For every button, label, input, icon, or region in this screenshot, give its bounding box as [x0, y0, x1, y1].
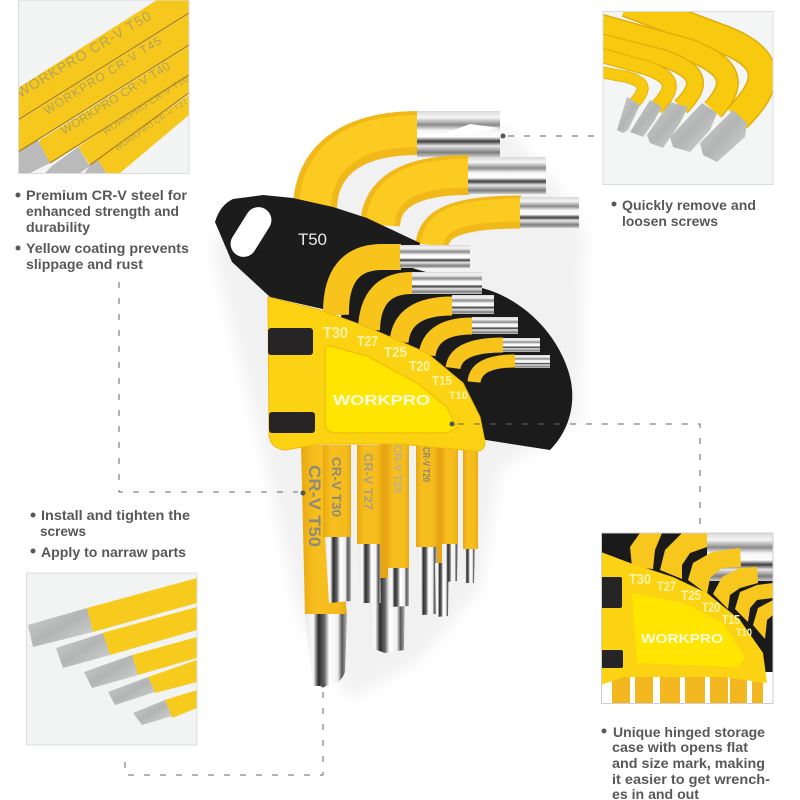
panel: steel close-up photo	[13, 0, 190, 173]
case body	[601, 552, 767, 685]
engraved text: WORKPRO CR-V T30	[101, 74, 190, 137]
bar T45	[18, 14, 189, 152]
arcs of wrenches	[630, 533, 773, 639]
long shafts below case	[301, 443, 478, 686]
shaft T30	[323, 445, 351, 603]
wrench T15	[453, 338, 540, 368]
L-wrench 4	[600, 55, 669, 137]
case size marks: T15	[432, 373, 452, 388]
wrench T30	[336, 245, 470, 315]
shaft T25 back	[368, 443, 405, 653]
shaft T20 with tip	[416, 445, 449, 617]
hinge bottom	[269, 412, 315, 433]
callout line: tip to tips panel	[125, 682, 326, 775]
short wrenches row	[336, 245, 550, 382]
shafts	[612, 677, 763, 703]
engraved text: WORKPRO CR-V T45	[41, 33, 164, 118]
callout line: case to hinged panel	[450, 422, 700, 526]
shaft T10	[463, 450, 478, 583]
close-up size marks: T30	[629, 571, 651, 588]
soft shadow	[210, 125, 585, 700]
hinges	[601, 577, 622, 608]
L-wrench 2	[600, 25, 727, 152]
tip bar 3	[84, 637, 197, 688]
text block: install bullets: Apply to narraw parts	[41, 544, 186, 560]
shaft T27: CR-V T27	[361, 453, 375, 510]
wrench T10	[474, 355, 550, 382]
panel: case close-up photo	[601, 533, 773, 703]
black backing	[601, 533, 773, 672]
case size marks: T20	[409, 358, 430, 375]
L-wrench 3	[600, 42, 695, 148]
bar T27	[90, 95, 189, 173]
close-up size marks	[629, 571, 752, 639]
text block: steel and coating bullets: slippage and rust	[26, 256, 143, 272]
text block: steel and coating bullets: Yellow coating prevents	[26, 240, 189, 256]
text block: quickly remove: loosen screws	[622, 213, 718, 229]
text block: hinged case bullet: case with opens flat	[612, 739, 748, 755]
case inner panel	[325, 346, 457, 433]
bar T50	[18, 0, 189, 120]
engraved text: WORKPRO CR-V T40	[58, 59, 173, 138]
shaft T27	[357, 445, 382, 603]
black case back: right lobe	[340, 268, 572, 450]
close-up logo: WORKPRO	[641, 631, 723, 646]
text block: hinged case bullet: and size mark, making	[612, 755, 765, 771]
text block: install bullets: Install and tighten the	[41, 507, 190, 523]
brand logo: WORKPRO	[333, 392, 430, 409]
text block: steel and coating bullets: Premium CR-V steel for	[26, 187, 188, 203]
case size marks: T30	[323, 325, 348, 342]
panel: tips close-up photo	[26, 573, 197, 745]
close-up size marks: T27	[657, 578, 676, 594]
black case back: handle with hole	[215, 195, 420, 320]
tip bar 1	[28, 578, 197, 647]
callout line: steel bullets to shaft	[119, 282, 306, 496]
text block: install bullets	[30, 507, 190, 560]
large wrench T50	[315, 111, 500, 210]
text block: hinged case bullet: it easier to get wrench-	[612, 771, 770, 787]
text block: steel and coating bullets: enhanced strength and	[26, 203, 179, 219]
tip bar 4	[108, 660, 197, 705]
shaft T20 with tip: CR-V T20	[420, 447, 431, 482]
yellow hinged case front	[268, 297, 485, 451]
wrench T27	[369, 272, 482, 330]
shaft T15	[442, 447, 458, 582]
case size marks: T25	[384, 344, 407, 361]
close-up size marks: T15	[722, 612, 740, 627]
L-wrench 5	[600, 72, 643, 133]
shaft T50	[301, 445, 347, 686]
main product: wrench set in holder	[210, 111, 585, 700]
small wrench T45	[432, 197, 579, 245]
bar T30	[78, 72, 189, 165]
shaft T25 front	[387, 443, 409, 607]
engraved text	[13, 7, 190, 153]
L-wrench 1	[627, 3, 762, 162]
case size marks: T27	[357, 333, 378, 350]
shaft T30: CR-V T30	[329, 457, 344, 517]
close-up size marks: T20	[702, 599, 720, 615]
case size marks	[323, 325, 468, 402]
hanging hole	[226, 202, 276, 262]
tip bar 5	[133, 690, 197, 725]
case panel	[632, 593, 745, 667]
close-up size marks: T10	[736, 627, 752, 639]
tip bar 2	[56, 607, 197, 668]
text block: quickly remove	[612, 197, 756, 229]
wrench T20	[427, 317, 518, 355]
engraved text: WORKPRO CR-V T27	[113, 97, 190, 153]
text block: quickly remove: Quickly remove and	[622, 197, 756, 213]
panel: wrench heads close-up photo	[600, 3, 773, 184]
hinge top	[268, 328, 313, 355]
close-up size marks: T25	[681, 587, 701, 603]
wrench T25	[399, 295, 494, 342]
callout line: tip to quick-remove panel	[500, 134, 598, 138]
steel heads	[18, 140, 106, 173]
medium wrench T40	[380, 157, 546, 225]
text block: hinged case bullet: Unique hinged storage	[613, 724, 765, 740]
text block: steel and coating bullets	[16, 187, 189, 272]
bar T40	[39, 46, 188, 166]
shaft T25 front: CR-V T25	[391, 445, 403, 493]
shaft T50: CR-V T50	[305, 465, 324, 547]
engraved text: WORKPRO CR-V T50	[13, 7, 154, 101]
text block: hinged case bullet	[602, 724, 770, 800]
text block: steel and coating bullets: durability	[26, 219, 90, 235]
case size marks: T10	[449, 390, 468, 402]
text block: install bullets: screws	[40, 523, 86, 539]
steel tips	[707, 533, 773, 581]
size label T50: T50	[298, 230, 327, 249]
